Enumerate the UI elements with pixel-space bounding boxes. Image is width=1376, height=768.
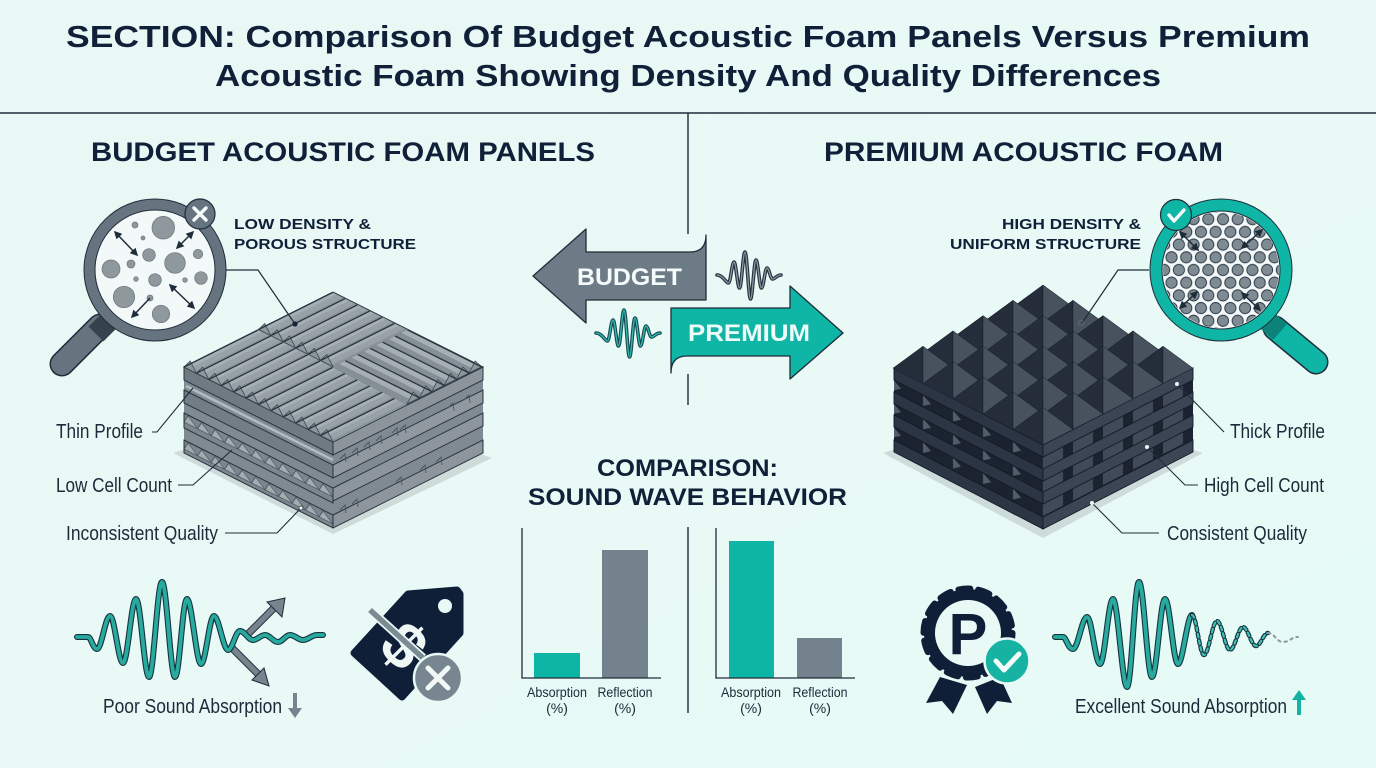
arrow: budget: BUDGET xyxy=(577,264,682,291)
icon: premium badge xyxy=(924,588,1030,714)
label: inconsistent quality: Inconsistent Quality xyxy=(66,523,218,545)
title: SECTION: Comparison Of Budget Acoustic Foam Panels Versus Premium xyxy=(66,19,1310,54)
layers side faces xyxy=(184,367,483,528)
label: thin profile: Thin Profile xyxy=(56,421,143,443)
callout: low density: POROUS STRUCTURE xyxy=(234,236,416,253)
title xyxy=(66,19,1310,93)
label: poor absorption: Poor Sound Absorption xyxy=(103,696,282,718)
label: low cell count xyxy=(56,450,232,497)
icon: small teal wave xyxy=(596,310,660,357)
badge: check xyxy=(1160,200,1192,230)
heading: premium: PREMIUM ACOUSTIC FOAM xyxy=(824,137,1223,167)
label: thick profile: Thick Profile xyxy=(1230,421,1325,443)
pores xyxy=(102,216,207,323)
heading: budget: BUDGET ACOUSTIC FOAM PANELS xyxy=(91,137,595,167)
icon: budget magnifier xyxy=(62,199,220,364)
ridges: left tile xyxy=(184,330,332,404)
pore arrows xyxy=(115,232,194,317)
panel: budget foam stack xyxy=(173,292,492,534)
labels xyxy=(527,684,652,716)
callout: high density: UNIFORM STRUCTURE xyxy=(950,236,1141,253)
arrow: premium: PREMIUM xyxy=(688,320,810,347)
icon: small grey wave xyxy=(717,252,781,299)
heading: comparison xyxy=(528,455,847,511)
arrow: premium xyxy=(671,286,843,379)
label: consistent quality xyxy=(1090,501,1307,545)
title: Acoustic Foam Showing Density And Quality Differences xyxy=(215,58,1161,93)
panel: premium foam stack xyxy=(883,285,1203,538)
bar chart: budget xyxy=(522,528,661,716)
labels: Absorption xyxy=(527,684,587,700)
bar chart: premium xyxy=(716,528,855,716)
icon: absorbed wave xyxy=(1055,582,1298,687)
icon: price tag: $ xyxy=(366,608,442,684)
label: thick profile xyxy=(1175,382,1325,443)
labels: Absorption xyxy=(721,684,781,700)
callout: low density: LOW DENSITY & xyxy=(234,216,371,233)
heading: comparison: SOUND WAVE BEHAVIOR xyxy=(528,484,847,511)
cell arrows xyxy=(1180,230,1262,310)
ridges: back tile xyxy=(258,292,407,367)
leader: low density xyxy=(226,270,298,327)
callout: high density xyxy=(950,216,1141,253)
icon: reflected wave xyxy=(77,582,323,686)
badge: cross xyxy=(185,199,215,229)
label: inconsistent quality xyxy=(66,506,303,545)
labels: Reflection xyxy=(598,684,652,700)
label: high cell count: High Cell Count xyxy=(1204,475,1324,497)
cell grid xyxy=(1163,212,1279,328)
leader: high density xyxy=(1078,270,1149,326)
callout: high density: HIGH DENSITY & xyxy=(1002,216,1141,233)
callout: low density xyxy=(234,216,416,253)
icon: price tag xyxy=(354,590,462,702)
heading: comparison: COMPARISON: xyxy=(597,455,778,482)
label: thin profile xyxy=(56,388,193,443)
label: high cell count xyxy=(1145,445,1324,497)
labels: (%) xyxy=(614,700,636,716)
labels xyxy=(721,684,848,716)
labels: (%) xyxy=(809,700,831,716)
ridges: front tile xyxy=(258,368,407,442)
label: low cell count: Low Cell Count xyxy=(56,475,172,497)
label: excellent absorption: Excellent Sound Absorption xyxy=(1075,696,1287,718)
gaps xyxy=(894,380,1193,517)
icon: premium magnifier xyxy=(1156,200,1316,362)
labels: Reflection xyxy=(792,684,848,700)
labels: (%) xyxy=(546,700,568,716)
labels: (%) xyxy=(740,700,762,716)
ridges: right tile xyxy=(333,330,481,404)
pyramids xyxy=(893,285,1193,445)
arrow: budget xyxy=(533,229,706,323)
icon: premium badge: P xyxy=(949,602,987,667)
slabs xyxy=(894,368,1193,529)
label: consistent quality: Consistent Quality xyxy=(1167,523,1307,545)
